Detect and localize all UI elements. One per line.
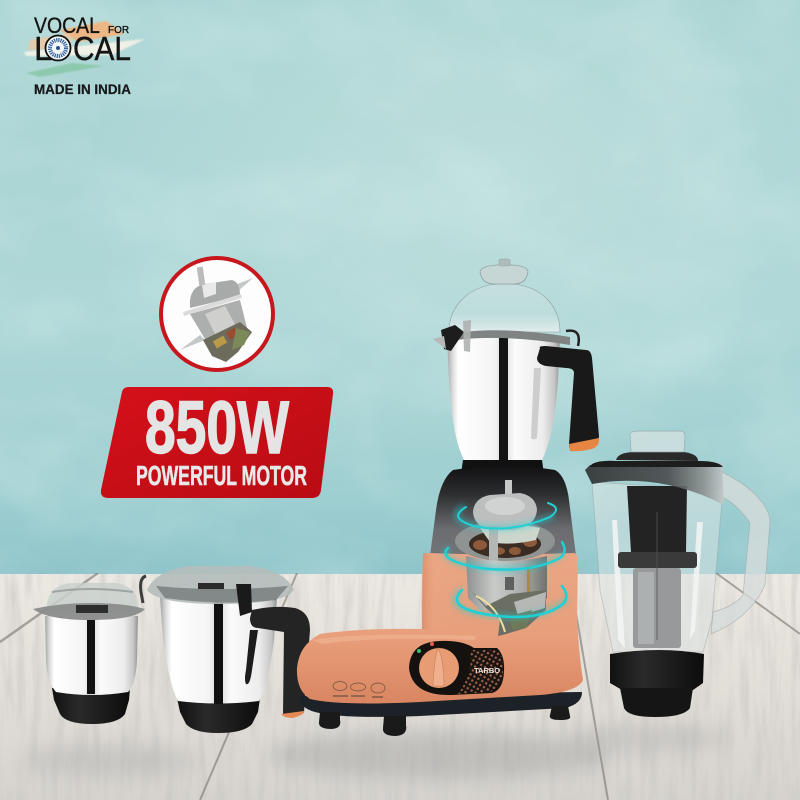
icon: motor in circle [183, 267, 252, 362]
medium jar handle [236, 584, 310, 718]
motion rings [445, 503, 566, 617]
base copper body [297, 553, 583, 703]
badge: motor icon circle [161, 258, 273, 370]
main jar clamp [433, 320, 471, 352]
motor shaft [505, 480, 512, 496]
ring glow [445, 507, 566, 617]
logo text: local with chakra: CAL [73, 30, 131, 67]
logo text: local with chakra [34, 30, 131, 67]
background: wooden table planks [0, 573, 800, 800]
medium jar clear lid [141, 566, 294, 604]
motor top bracket [473, 493, 537, 530]
control panel [409, 641, 504, 695]
main jar black stripe [499, 338, 508, 463]
juicer handle [711, 472, 770, 634]
logo text: made in india: MADE IN INDIA [34, 81, 131, 97]
juicer feed cup [630, 431, 685, 452]
juicer side fins [612, 520, 703, 648]
juicer jar [585, 431, 770, 717]
juicer mesh strainer [633, 568, 681, 648]
juicer clear body [592, 482, 723, 652]
blender motor base [297, 460, 583, 736]
base black footing strip [298, 692, 582, 717]
main grinder jar with dome lid [433, 259, 599, 463]
small jar clear lid [33, 583, 145, 620]
top ring [458, 503, 556, 529]
logo tricolour brush strokes [24, 21, 145, 77]
base black collar [461, 460, 544, 474]
juicer black base [610, 650, 704, 717]
base top platform edge [312, 635, 476, 644]
medium jar black stripe [214, 602, 223, 704]
motor lower wires and brushes [470, 590, 546, 636]
base upper dark housing [430, 466, 576, 556]
medium jar [141, 566, 310, 733]
main jar dome lid [449, 259, 560, 332]
logo text: vocal for: VOCAL [34, 13, 100, 38]
cutaway motor [455, 480, 555, 636]
juicer filter tube [627, 486, 687, 552]
medium jar steel body [160, 598, 277, 704]
indicator lights [417, 642, 434, 653]
feet [319, 706, 570, 736]
motor copper windings [469, 530, 541, 558]
logo text: local with chakra: L [34, 30, 52, 67]
brand name: TARBO [474, 666, 500, 675]
background: teal plaster wall [0, 0, 800, 578]
medium jar base [177, 698, 260, 733]
bottom ring [457, 586, 566, 617]
main jar steel body [447, 338, 560, 463]
main jar handle [537, 331, 599, 451]
small jar base [52, 688, 130, 724]
logo: vocal for local made in india [24, 13, 145, 97]
small chutney jar [33, 583, 145, 724]
small jar steel body [45, 616, 138, 695]
subheading: powerful motor: POWERFUL MOTOR [136, 460, 307, 491]
motor cream collar [480, 524, 540, 544]
juicer centre line [656, 512, 658, 640]
motor stator [466, 556, 547, 610]
juicer lid [585, 452, 724, 505]
logo text: vocal for: FOR [108, 25, 129, 36]
heading: 850W: 850W [145, 386, 289, 469]
main jar rim [456, 330, 570, 345]
main jar highlight slot [531, 368, 541, 440]
motor outer frame [455, 521, 555, 561]
middle ring [445, 542, 565, 570]
small jar black stripe [87, 620, 95, 694]
speed dial knob [419, 648, 459, 688]
certification logos [333, 682, 385, 697]
juicer filter collar [618, 552, 697, 568]
panel: red 850W motor banner [101, 386, 333, 498]
